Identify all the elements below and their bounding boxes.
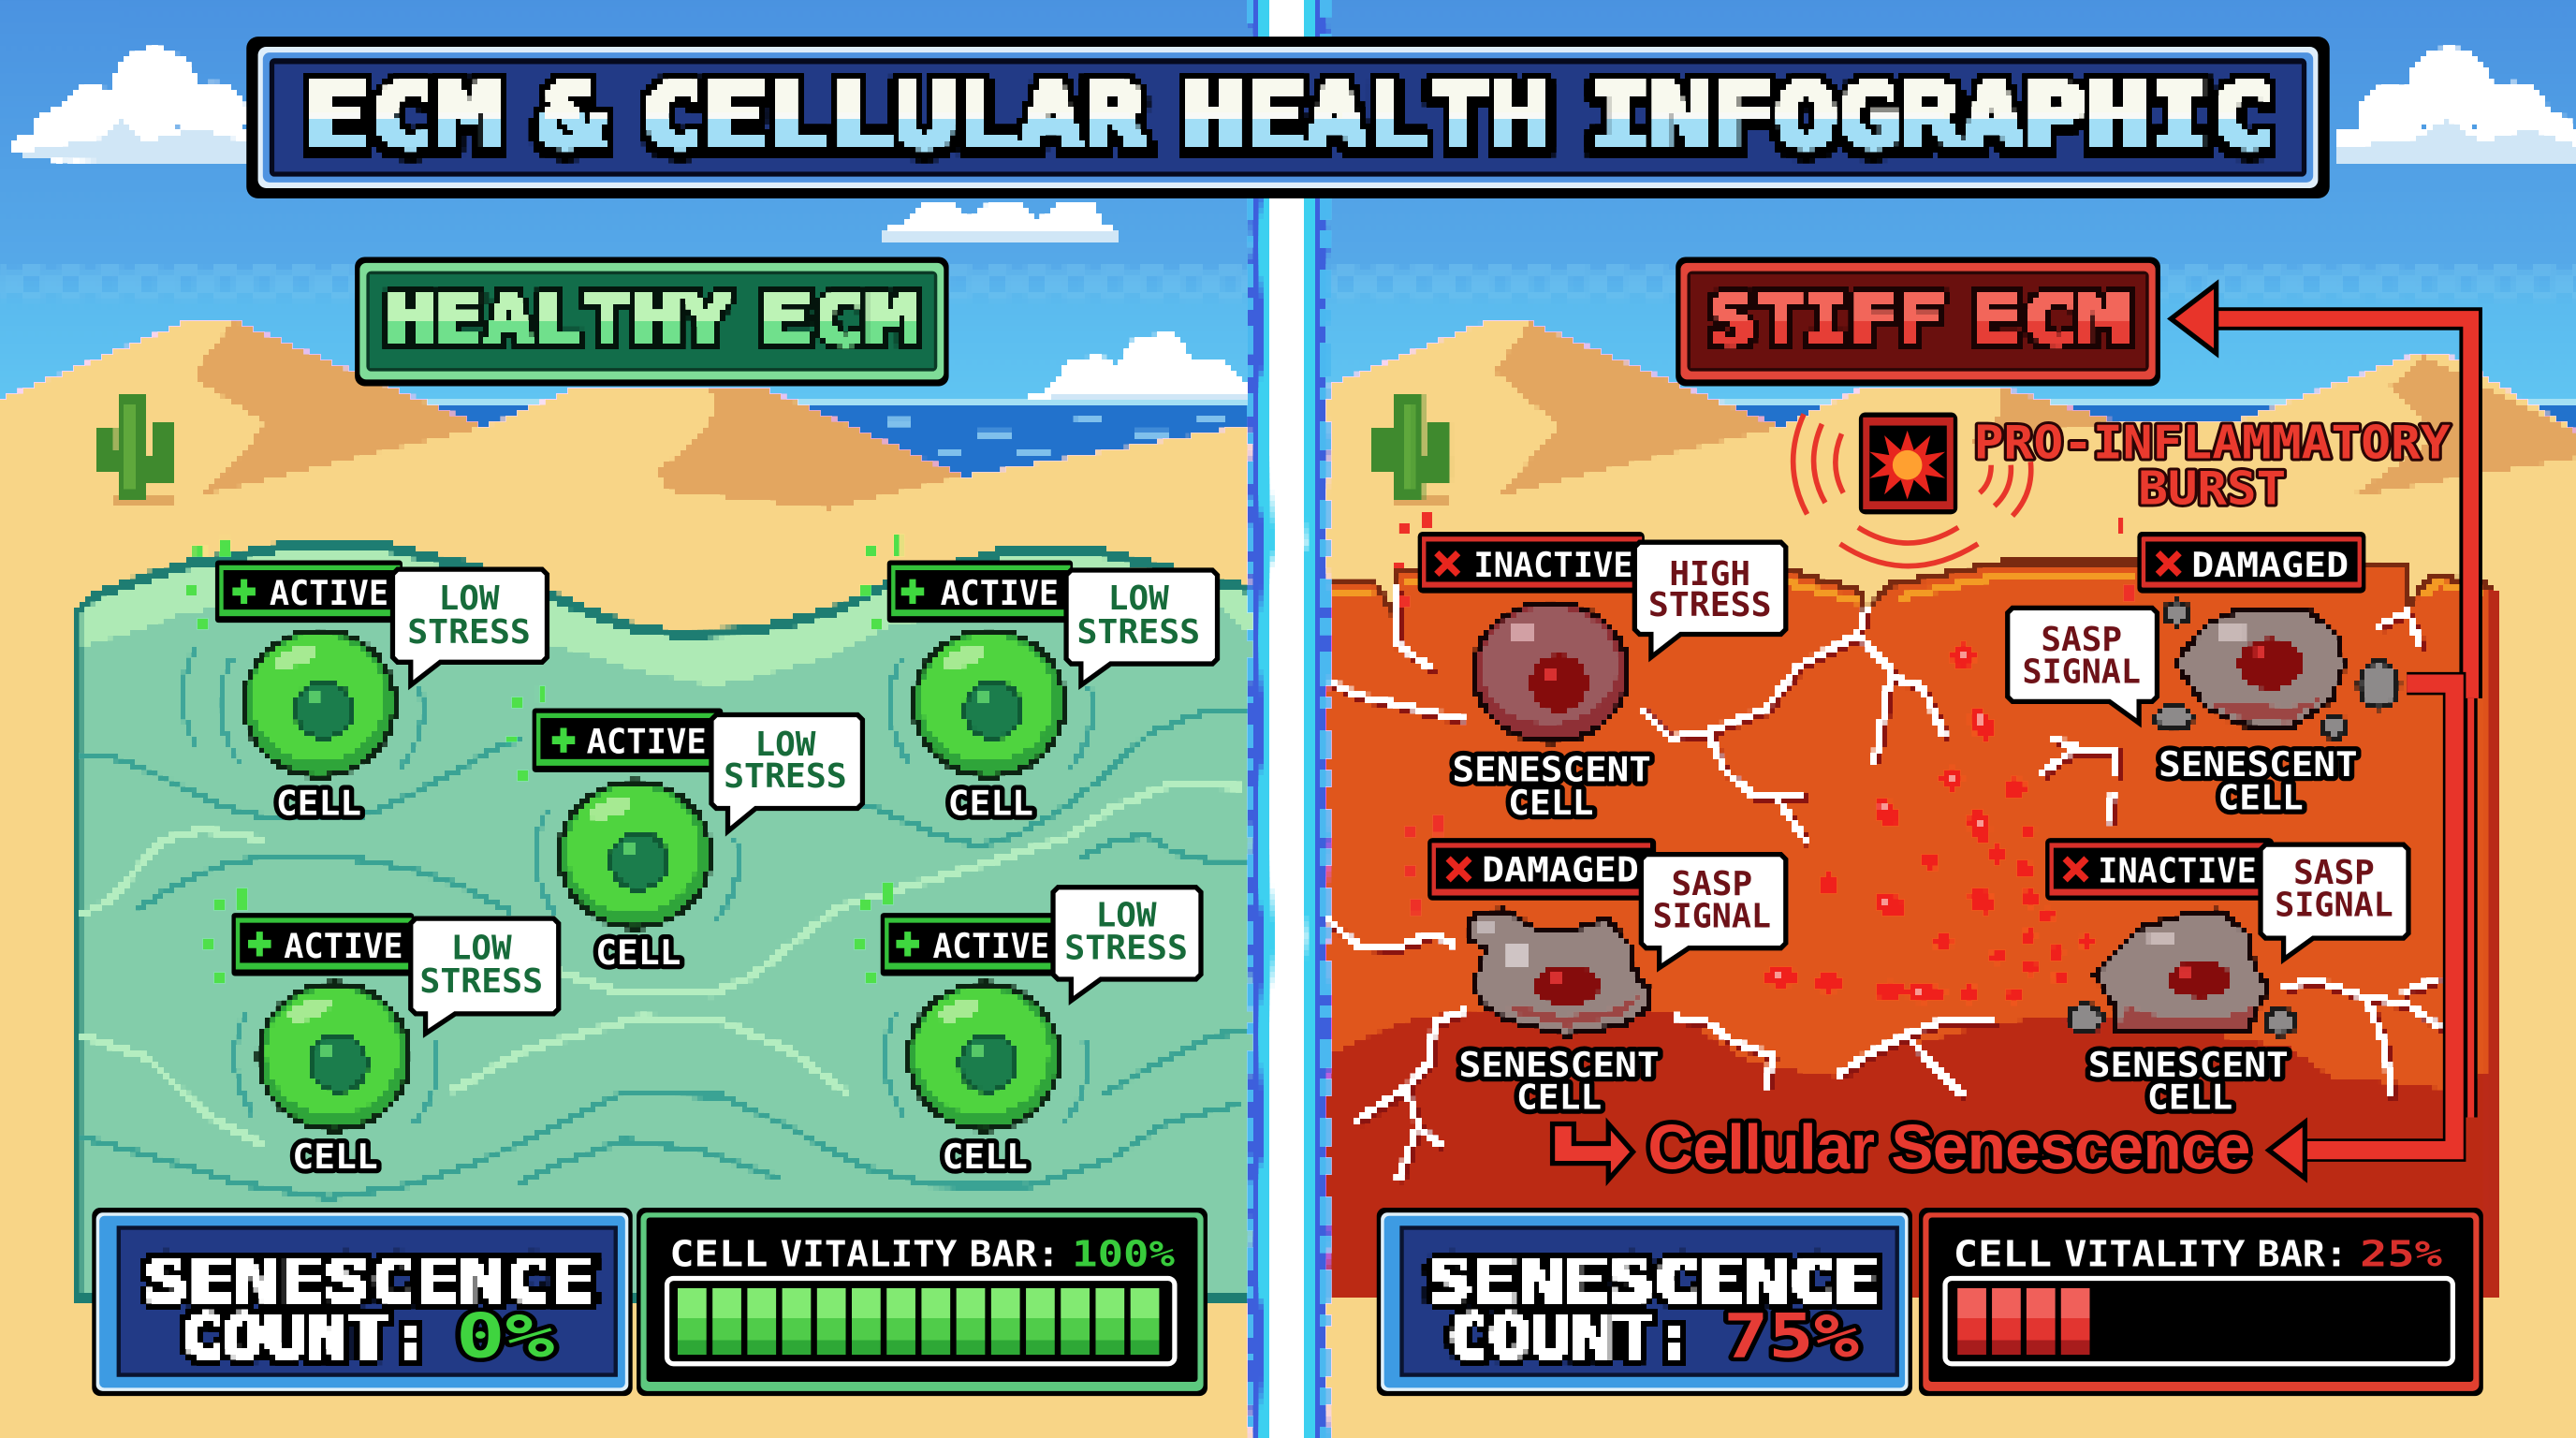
label: senescent cell, upper left	[1453, 750, 1651, 823]
sea: left	[378, 399, 1265, 500]
title text: ECM	[304, 66, 501, 167]
label: senescent cell, upper left: CELL	[1508, 783, 1593, 823]
cloud: top left	[10, 48, 246, 165]
label: senescent cell, lower right: CELL	[2147, 1078, 2232, 1118]
label: senescent cell, upper left: SENESCENT	[1453, 750, 1651, 790]
tag and bubble: healthy cell 4: ACTIVE	[284, 926, 403, 966]
cloud: over left sea	[1010, 332, 1257, 404]
dunes: left	[0, 320, 1257, 1438]
title banner	[246, 37, 2330, 198]
tag and bubble: healthy cell 4	[231, 913, 559, 1034]
panel: stiff ECM matrix	[1314, 562, 2499, 1299]
label: cell 4: CELL	[292, 1137, 378, 1177]
tag and bubble: senescent cell, damaged SASP (upper right): SASP	[2041, 621, 2122, 659]
label: senescent cell, upper right	[2159, 744, 2358, 817]
healthy cell 3	[535, 778, 739, 931]
title text: &	[538, 66, 605, 167]
divider: wavy energy barrier	[1251, 0, 1325, 1438]
tag and bubble: healthy cell 5: ACTIVE	[933, 926, 1049, 966]
tag and bubble: senescent cell, inactive high stress	[1418, 532, 1786, 657]
heading plate: healthy ECM	[355, 257, 949, 386]
tag and bubble: healthy cell 1	[215, 560, 547, 685]
tag and bubble: senescent cell, damaged SASP (upper right): SIGNAL	[2023, 653, 2141, 692]
vitality label, stiff	[1954, 1233, 2442, 1275]
vitality segments, healthy	[678, 1288, 1159, 1355]
sea: right	[1660, 399, 2576, 437]
vitality segments, stiff	[1957, 1288, 2089, 1355]
feedback arrow: up to stiff ECM	[2171, 285, 2471, 698]
heading text: stiff ECM: ECM	[1969, 282, 2130, 361]
tag and bubble: senescent cell, inactive high stress: STRESS	[1648, 586, 1772, 624]
sparkles: active cells	[187, 534, 902, 984]
healthy cell 4	[235, 980, 437, 1133]
healthy cell 1	[183, 627, 423, 780]
vitality label, stiff: CELL	[1954, 1233, 2052, 1275]
title text: HEALTH	[1183, 66, 1551, 167]
label: senescent cell, lower left	[1459, 1045, 1660, 1118]
count text, stiff: COUNT:	[1448, 1302, 1694, 1372]
label: senescent cell, lower right	[2088, 1045, 2289, 1118]
SASP droplets	[1764, 643, 2094, 1003]
tag and bubble: senescent cell, inactive high stress: INACTIVE	[1473, 545, 1633, 585]
senescent cell: damaged blob, lower left	[1467, 910, 1651, 1035]
count value, healthy: 0%	[456, 1302, 554, 1372]
tag and bubble: healthy cell 3: STRESS	[724, 757, 847, 796]
vitality label, healthy: BAR:	[970, 1233, 1060, 1275]
tag and bubble: senescent cell, damaged SASP (lower left): SIGNAL	[1653, 898, 1771, 936]
tag and bubble: healthy cell 5: STRESS	[1064, 929, 1188, 967]
debris rocks	[2068, 601, 2398, 1034]
label: senescent cell, upper right: CELL	[2217, 777, 2304, 817]
vitality label, stiff: BAR:	[2258, 1233, 2348, 1275]
panel: healthy ECM matrix	[74, 539, 1257, 1301]
vitality label, healthy: VITALITY	[781, 1233, 958, 1275]
tag and bubble: senescent cell, inactive SASP (lower right): INACTIVE	[2098, 850, 2257, 890]
heading text: stiff ECM: STIFF	[1708, 282, 1945, 361]
tag and bubble: senescent cell, damaged SASP (lower left): DAMAGED	[1482, 850, 1639, 890]
label: pro-inflammatory burst: BURST	[2138, 461, 2286, 515]
label: cell 3: CELL	[595, 932, 681, 973]
sky	[0, 0, 2576, 493]
ECM fibers: pale	[80, 784, 1240, 1145]
feedback arrow: lower rail	[2467, 690, 2475, 1117]
count text, healthy: SENESCENCE	[144, 1246, 595, 1315]
label: pro-inflammatory burst: PRO-INFLAMMATORY	[1974, 416, 2451, 470]
label: senescent cell, lower left: SENESCENT	[1459, 1045, 1660, 1085]
tag and bubble: healthy cell 1: ACTIVE	[270, 573, 388, 613]
panel: senescence count, stiff	[1377, 1208, 1912, 1396]
ECM fibers: teal	[80, 712, 1251, 1197]
tag and bubble: healthy cell 4: LOW	[451, 929, 512, 967]
dunes: right	[1327, 322, 2576, 1438]
heading text: stiff ECM	[1708, 282, 2130, 361]
tag and bubble: senescent cell, damaged SASP (upper right): DAMAGED	[2191, 545, 2349, 585]
icon: right cactus	[1372, 392, 1453, 505]
tag and bubble: healthy cell 3: LOW	[754, 726, 816, 764]
tag and bubble: senescent cell, inactive high stress: HIGH	[1669, 555, 1750, 594]
title text	[304, 66, 2274, 167]
senescent cell: damaged blob, upper right	[2175, 609, 2345, 728]
vitality label, stiff: VITALITY	[2064, 1233, 2246, 1275]
icon: pro-inflammatory burst	[1859, 413, 1957, 514]
vitality label, healthy: CELL	[669, 1233, 768, 1275]
pixel-style display text	[144, 66, 2274, 1372]
cloud: top right	[2336, 48, 2576, 165]
label: senescent cell, upper right: SENESCENT	[2159, 744, 2358, 785]
count text, stiff: SENESCENCE	[1427, 1246, 1880, 1315]
signal arrow: to cellular senescence	[2269, 683, 2454, 1178]
panel: vitality bar, healthy	[637, 1208, 1208, 1396]
label: senescent cell, lower left: CELL	[1516, 1078, 1602, 1118]
vitality label, healthy: 100%	[1072, 1233, 1175, 1275]
matrix cracks	[1321, 587, 2443, 1183]
label: pro-inflammatory burst	[1974, 416, 2451, 515]
tag and bubble: healthy cell 2: ACTIVE	[941, 573, 1059, 613]
label: cellular senescence: Cellular Senescence	[1647, 1113, 2250, 1183]
icon: left cactus	[95, 392, 174, 505]
arrow: into cellular senescence	[1553, 1123, 1633, 1180]
tag and bubble: senescent cell, damaged SASP (lower left): SASP	[1672, 865, 1752, 903]
heading text: healthy ECM	[386, 282, 918, 361]
heading text: healthy ECM: HEALTHY	[386, 282, 732, 361]
label: cell 1: CELL	[276, 784, 361, 824]
panel: vitality bar, stiff	[1919, 1208, 2483, 1396]
icon: shock waves around burst	[1793, 414, 2031, 566]
tag and bubble: senescent cell, damaged SASP (upper right)	[2008, 532, 2365, 723]
sparkles: damaged cells	[1393, 513, 2132, 914]
count text, stiff	[1427, 1246, 1880, 1372]
heading plate: stiff ECM	[1676, 257, 2160, 386]
vitality label, healthy	[669, 1233, 1175, 1275]
tag and bubble: healthy cell 5: LOW	[1096, 896, 1157, 934]
tag and bubble: senescent cell, inactive SASP (lower right)	[2045, 838, 2408, 960]
tag and bubble: healthy cell 2: STRESS	[1076, 613, 1200, 652]
tag and bubble: senescent cell, inactive SASP (lower right): SIGNAL	[2275, 887, 2393, 925]
title text: INFOGRAPHIC	[1588, 66, 2274, 167]
panel: senescence count, healthy	[92, 1208, 633, 1396]
tag and bubble: healthy cell 5	[881, 888, 1201, 1001]
tag and bubble: healthy cell 2: LOW	[1108, 580, 1169, 618]
senescent cell: rock-like blob, lower right	[2095, 910, 2269, 1032]
count text, healthy: COUNT:	[181, 1302, 432, 1372]
tag and bubble: healthy cell 1: LOW	[439, 580, 500, 618]
vitality label, stiff: 25%	[2360, 1233, 2442, 1275]
healthy cell 2	[889, 627, 1092, 780]
tag and bubble: senescent cell, damaged SASP (lower left)	[1427, 838, 1786, 968]
tag and bubble: healthy cell 1: STRESS	[407, 613, 531, 652]
title text: CELLULAR	[640, 66, 1146, 167]
label: cell 2: CELL	[948, 784, 1033, 824]
cloud: center	[881, 200, 1117, 242]
count value, stiff: 75%	[1723, 1302, 1859, 1372]
senescent cell: inactive round	[1471, 599, 1632, 745]
label: senescent cell, lower right: SENESCENT	[2088, 1045, 2289, 1085]
tag and bubble: senescent cell, inactive SASP (lower right): SASP	[2293, 854, 2375, 892]
healthy cell 5	[885, 980, 1088, 1133]
tag and bubble: healthy cell 4: STRESS	[419, 962, 543, 1001]
tag and bubble: healthy cell 3	[533, 708, 862, 831]
heading text: healthy ECM: ECM	[760, 282, 918, 361]
tag and bubble: healthy cell 3: ACTIVE	[587, 722, 707, 762]
label: cell 5: CELL	[943, 1137, 1028, 1177]
tag and bubble: healthy cell 2	[887, 560, 1218, 685]
count text, healthy	[144, 1246, 595, 1372]
